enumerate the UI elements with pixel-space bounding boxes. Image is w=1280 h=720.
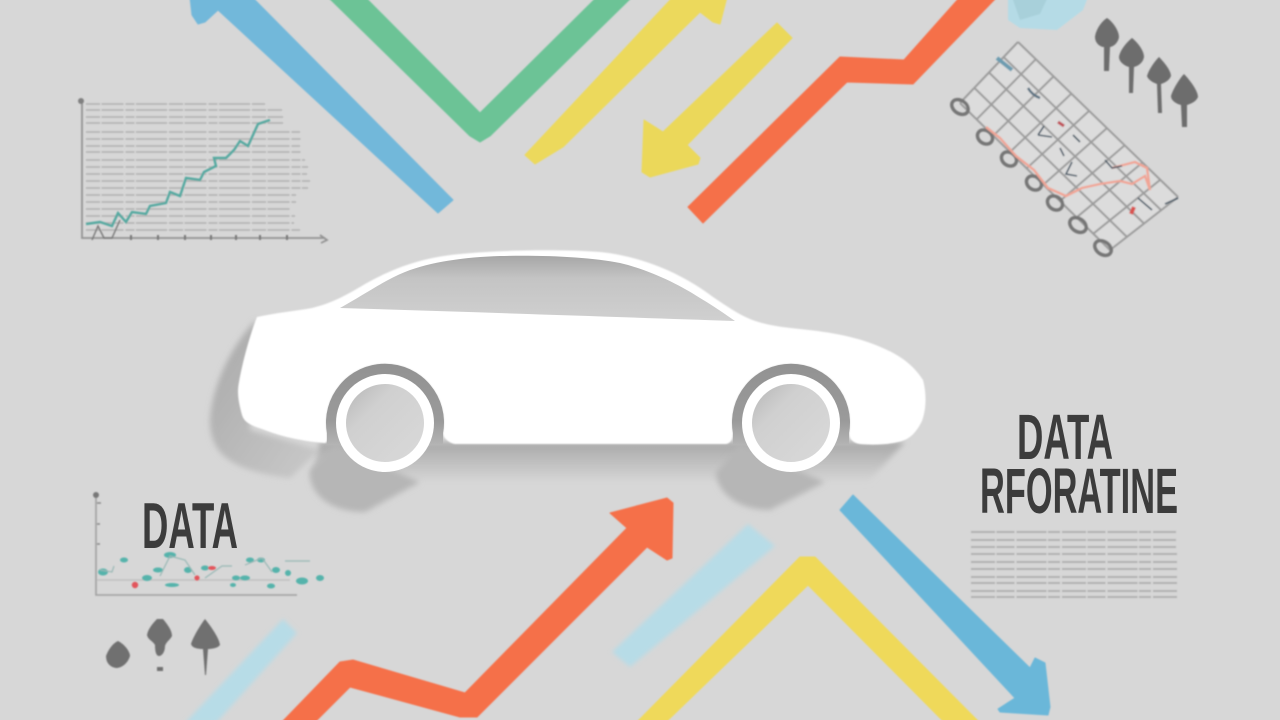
- binding rings: [949, 97, 1114, 258]
- light blue stripe bottom left: [185, 619, 297, 720]
- car illustration: [210, 250, 926, 512]
- car window: [340, 256, 735, 321]
- arrow: green chevron: [328, 0, 632, 142]
- axis ticks: [97, 503, 101, 544]
- icon: dot: [157, 667, 163, 671]
- car body: [238, 250, 926, 445]
- chart: rotated ring-bound grid: [949, 42, 1178, 258]
- car long shadow: [210, 320, 905, 512]
- teal trend line: [86, 120, 270, 226]
- arrow: yellow rising: [525, 0, 727, 164]
- arrow: blue top-left: [190, 0, 453, 213]
- chart axes: [82, 100, 327, 243]
- chart: top-left line chart with text: [78, 98, 327, 243]
- heading: DATA RFORATINE: [980, 401, 1178, 527]
- data marks: [997, 58, 1178, 214]
- tree 1: [1095, 18, 1119, 71]
- arrow: orange bottom trend with head: [282, 498, 673, 720]
- grid paper: [960, 42, 1178, 250]
- icon: drop: [106, 641, 130, 668]
- heading: DATA bottom left: DATA: [142, 489, 238, 562]
- axis ticks: [131, 235, 287, 240]
- icons: four grey trees top right: [1095, 18, 1198, 127]
- tree 3: [1147, 57, 1171, 113]
- axis marker: [93, 492, 99, 498]
- right wheel: [747, 379, 835, 467]
- teal data marks: [98, 552, 324, 588]
- faint trend line: [100, 556, 310, 578]
- secondary dark line: [92, 220, 120, 240]
- arrow: blue falling with head: [840, 495, 1050, 715]
- arrow: yellow falling: [642, 23, 792, 177]
- grid lines: [960, 42, 1178, 250]
- baseline: [97, 579, 290, 581]
- left wheel: [341, 379, 429, 467]
- arrow: yellow inverted chevron: [636, 557, 980, 720]
- axis marker: [78, 98, 84, 104]
- tree 4: [1171, 74, 1198, 127]
- icon: arrow tree: [191, 619, 220, 675]
- chart: bottom-left small data chart: [93, 492, 324, 595]
- light blue blob top: [1008, 0, 1088, 30]
- paragraph placeholder lines: [971, 532, 1177, 597]
- icon: spade: [147, 619, 172, 656]
- red data marks: [132, 566, 216, 588]
- pink data line: [986, 127, 1150, 196]
- left wheel arch: [326, 364, 444, 445]
- icons: grey shapes bottom left: [106, 619, 220, 675]
- heading line 1: DATA: [1017, 401, 1113, 473]
- right wheel arch: [732, 364, 850, 445]
- tree 2: [1119, 38, 1144, 93]
- light blue stripe centre: [612, 524, 775, 667]
- chart axes: [96, 495, 297, 595]
- chart text lines: [86, 104, 310, 230]
- arrow: orange top trend: [688, 0, 997, 223]
